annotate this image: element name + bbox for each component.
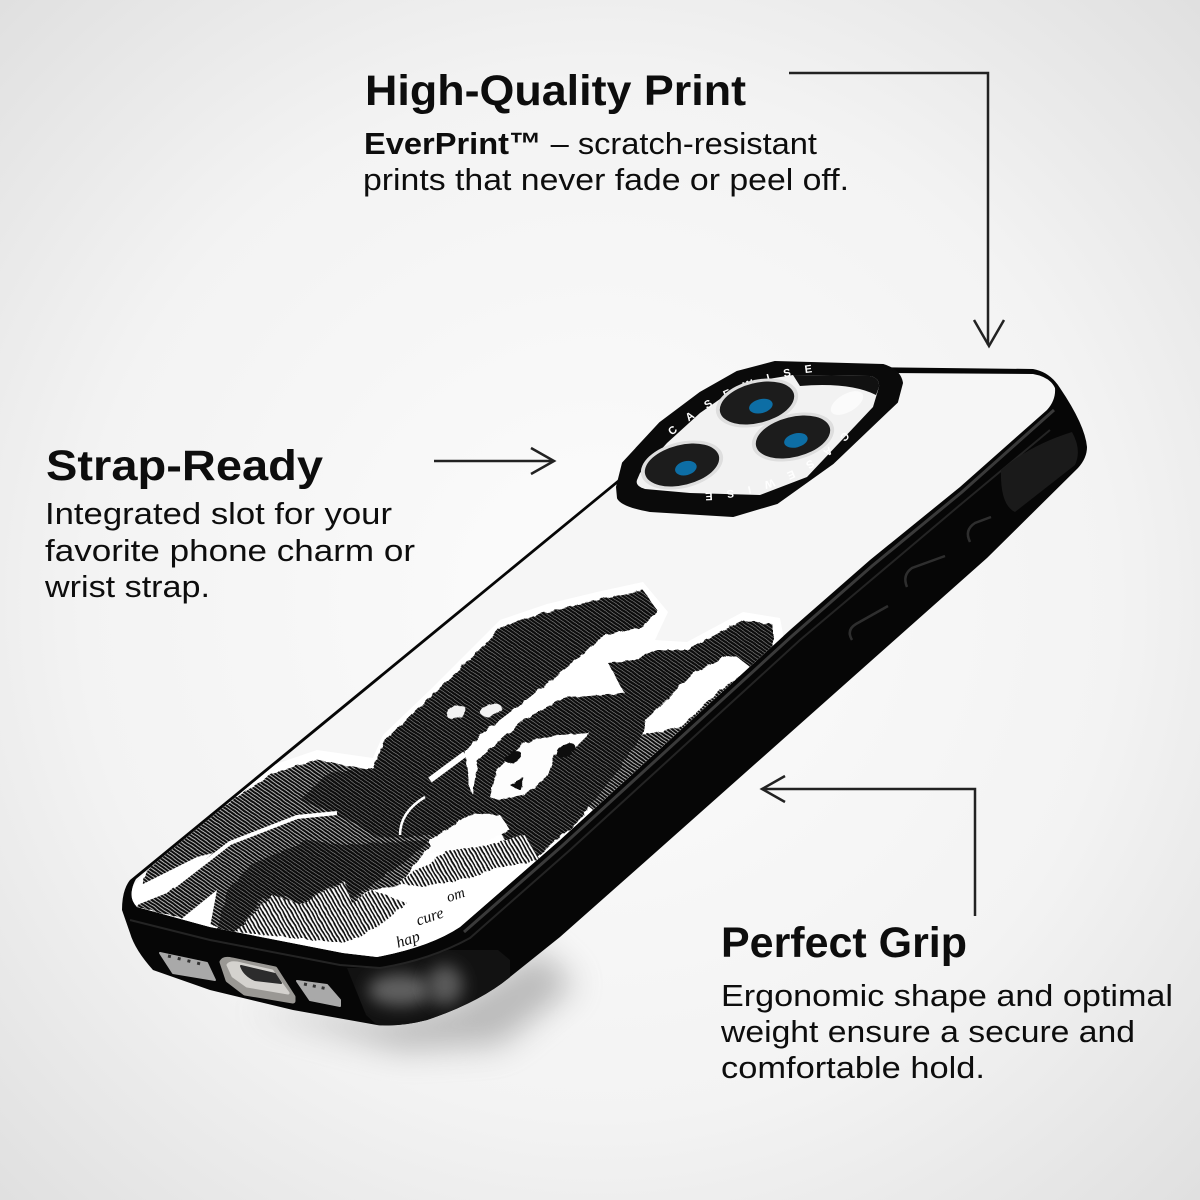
wing and lower mass [137, 760, 445, 935]
usb port [222, 959, 293, 1001]
strand shading at sleeve [588, 676, 740, 810]
phone case illustration [122, 361, 1087, 1026]
bottom ports [160, 953, 340, 1006]
lens: lower left [636, 433, 728, 497]
dark upper recess [793, 375, 879, 395]
handwriting in the artwork: omse [354, 956, 389, 981]
girl dress [397, 835, 540, 887]
creature head and torso [300, 590, 657, 838]
screen back panel [132, 372, 1055, 957]
girl face [490, 733, 590, 800]
description: EverPrint™ – scratch-resistant [364, 126, 817, 161]
glossy bottom corner [347, 950, 510, 1026]
callout: perfect grip [720, 776, 1173, 1085]
camera window [637, 375, 879, 495]
mute switch [968, 517, 991, 542]
heading: High-Quality Print [365, 67, 746, 115]
description: weight ensure a secure and [720, 1014, 1135, 1049]
handwriting in the artwork: om [445, 885, 467, 906]
right speaker [297, 981, 340, 1006]
screen edge reflection [464, 410, 1054, 932]
heading: Perfect Grip [721, 919, 967, 967]
white sticker outline [120, 582, 786, 960]
collar and chest [429, 813, 510, 846]
description: comfortable hold. [721, 1050, 985, 1085]
brand text on ring [668, 364, 849, 500]
dripping talons [217, 840, 430, 935]
description [44, 496, 415, 604]
phone drop shadow [250, 950, 575, 1050]
handwriting in the artwork: cure [414, 905, 446, 929]
left speaker [160, 953, 215, 980]
description: Ergonomic shape and optimal [721, 978, 1173, 1013]
action button [1001, 432, 1078, 512]
description: favorite phone charm or [45, 533, 415, 568]
creature eyes [446, 704, 503, 719]
arrow [762, 776, 975, 916]
arrow [789, 73, 1004, 346]
creature right arm [608, 620, 773, 722]
side buttons [850, 517, 991, 640]
description [720, 978, 1173, 1085]
description [363, 126, 849, 197]
callout: strap-ready [44, 442, 554, 604]
side rim highlight [130, 430, 1050, 968]
handwriting in the artwork: hap [394, 928, 422, 952]
lens: right [747, 405, 839, 469]
description: wrist strap. [44, 569, 210, 604]
arrow [434, 448, 554, 474]
callout: high-quality print [363, 67, 1004, 346]
brand text on ring: CASEWISE [706, 433, 849, 500]
camera bump [616, 361, 903, 517]
heading: Strap-Ready [46, 442, 323, 490]
camera ring [617, 362, 902, 516]
lens: top [711, 371, 803, 435]
case body [122, 366, 1087, 1025]
flash [827, 386, 867, 420]
girl hair [470, 693, 647, 857]
brand text on ring: CASEWISE [668, 364, 812, 434]
volume up [905, 556, 945, 587]
printed sketch artwork [120, 582, 786, 981]
handwriting in the artwork [396, 890, 466, 948]
description: prints that never fade or peel off. [363, 162, 849, 197]
facial features [503, 740, 578, 790]
description: Integrated slot for your [45, 496, 392, 531]
lower hatched drape [235, 882, 407, 943]
volume down [850, 606, 888, 640]
white wing streaks [137, 754, 465, 927]
